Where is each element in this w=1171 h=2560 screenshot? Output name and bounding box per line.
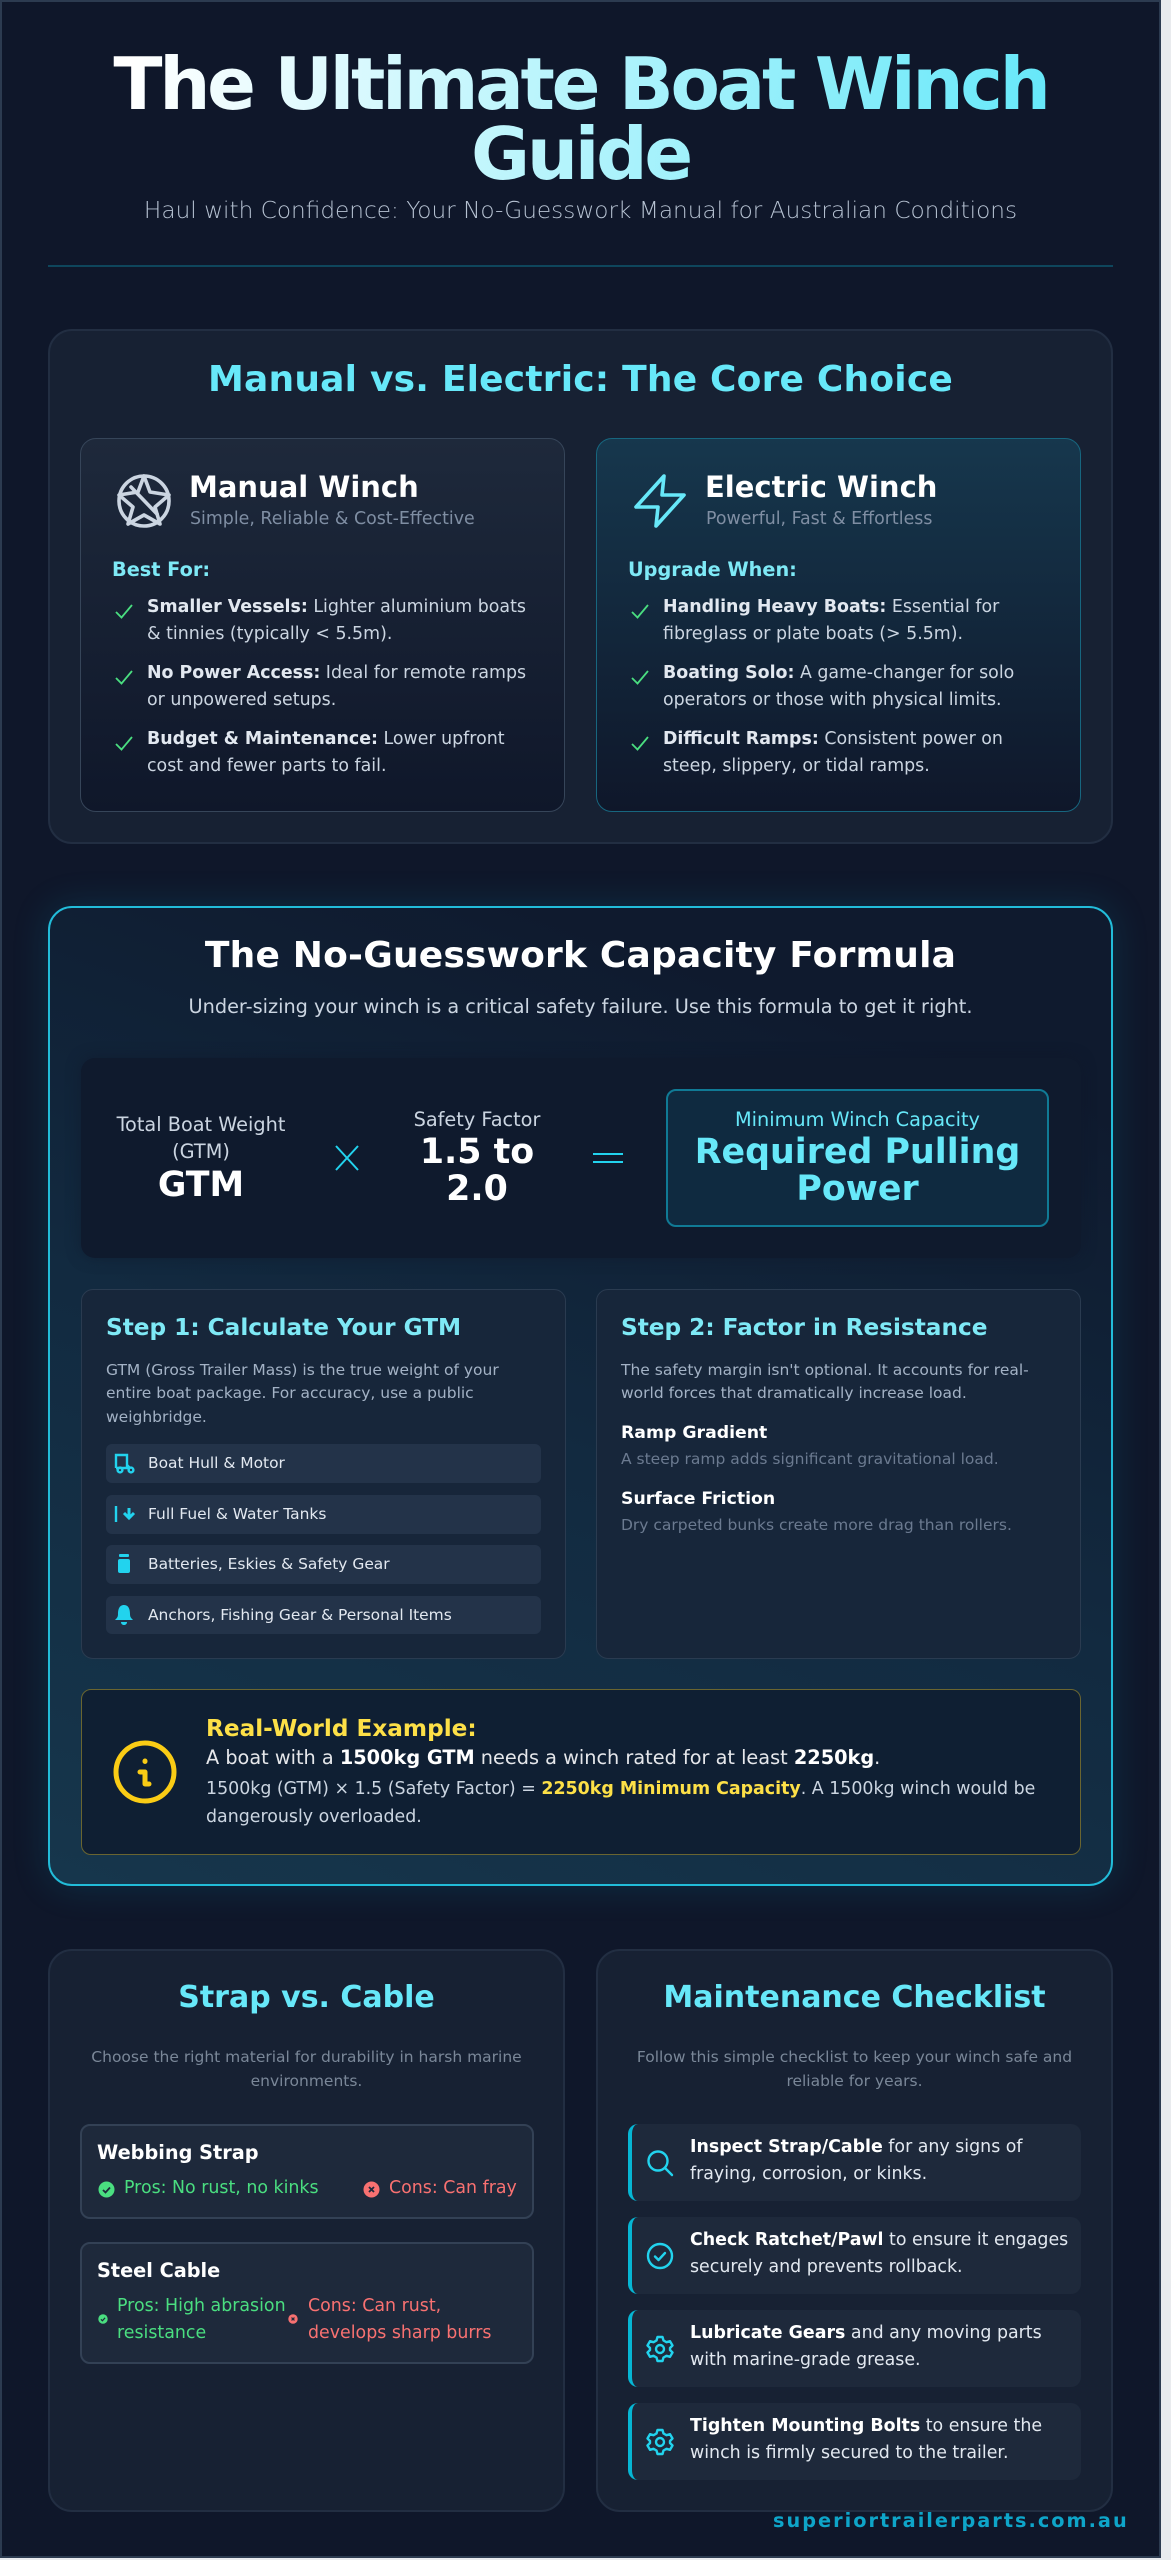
- steel cons: [288, 2296, 491, 2343]
- icon: equals: [593, 1153, 623, 1163]
- icon: fuel: [114, 1506, 135, 1522]
- list: best for items: Smaller Vessels: Lighter aluminium boats: [147, 597, 526, 617]
- item: inspect: Inspect Strap/Cable for any signs of: [690, 2137, 1023, 2157]
- heading: formula: The No-Guesswork Capacity Formula: [205, 935, 956, 976]
- webbing cons: Cons: Can fray: [389, 2178, 517, 2198]
- item: anchors: [106, 1596, 541, 1634]
- factor: ramp gradient: [621, 1423, 999, 1468]
- card: steel cable: [80, 2242, 534, 2364]
- list: upgrade items: fibreglass or plate boats (> 5.5m).: [663, 624, 963, 644]
- item: boat hull: Boat Hull & Motor: [148, 1454, 285, 1472]
- step 1 text: GTM (Gross Trailer Mass) is the true weight of your: [106, 1361, 499, 1379]
- item: ratchet: [628, 2217, 1081, 2294]
- item: ratchet: Check Ratchet/Pawl to ensure it engages: [690, 2230, 1068, 2250]
- card: manual winch: [80, 438, 565, 812]
- factor: surface friction: [621, 1489, 1012, 1534]
- item: fuel tanks: Full Fuel & Water Tanks: [148, 1505, 326, 1523]
- item: boat hull: [106, 1444, 541, 1483]
- item: anchors: Anchors, Fishing Gear & Personal Items: [148, 1606, 452, 1624]
- card: electric winch: [596, 438, 1081, 812]
- example calculation: [206, 1779, 1035, 1827]
- icon: manual winch star wheel: [117, 474, 171, 528]
- list: upgrade items: operators or those with physical limits.: [663, 690, 1002, 710]
- example heading: Real-World Example:: [206, 1715, 477, 1742]
- manual winch title: Manual Winch: [189, 470, 419, 504]
- item: gears: [628, 2310, 1081, 2387]
- card: step 1: [81, 1289, 566, 1659]
- step 1 text: weighbridge.: [106, 1408, 207, 1426]
- example calculation: 1500kg (GTM) × 1.5 (Safety Factor) = 2250kg Minimum Capacity. A 1500kg winch would be: [206, 1779, 1035, 1799]
- steel cons: develops sharp burrs: [308, 2323, 491, 2343]
- item: bolts: winch is firmly secured to the trailer.: [690, 2443, 1008, 2463]
- item: bolts: Tighten Mounting Bolts to ensure the: [690, 2416, 1042, 2436]
- list: best for items: Budget & Maintenance: Lower upfront: [147, 729, 505, 749]
- term: GTM: [116, 1113, 285, 1205]
- maintenance intro: Follow this simple checklist to keep your winch safe and: [637, 2048, 1072, 2066]
- webbing title: Webbing Strap: [97, 2141, 259, 2164]
- example sentence: A boat with a 1500kg GTM needs a winch rated for at least 2250kg.: [206, 1746, 880, 1769]
- list: upgrade items: steep, slippery, or tidal ramps.: [663, 756, 930, 776]
- item: inspect: [628, 2124, 1081, 2201]
- heading: strap vs cable: Strap vs. Cable: [178, 1980, 435, 2015]
- item: inspect: fraying, corrosion, or kinks.: [690, 2164, 927, 2184]
- result box: [666, 1089, 1049, 1227]
- list: upgrade items: Difficult Ramps: Consistent power on: [663, 729, 1003, 749]
- webbing pros: Pros: No rust, no kinks: [124, 2178, 319, 2198]
- card: step 2: [596, 1289, 1081, 1659]
- steel title: Steel Cable: [97, 2259, 220, 2282]
- icon: gear: [646, 2336, 674, 2362]
- step 1 text: entire boat package. For accuracy, use a public: [106, 1384, 474, 1402]
- result box: Minimum Winch Capacity: [735, 1108, 980, 1131]
- term: GTM: GTM: [158, 1165, 244, 1205]
- factor: surface friction: Dry carpeted bunks create more drag than rollers.: [621, 1516, 1012, 1534]
- icon: gear: [646, 2428, 674, 2456]
- electric winch title: Electric Winch: [705, 470, 937, 504]
- strap intro: [91, 2048, 522, 2090]
- icon: trailer: [114, 1454, 135, 1474]
- list: upgrade items: Boating Solo: A game-changer for solo: [663, 663, 1014, 683]
- panel: strap vs cable: [48, 1949, 565, 2512]
- list: upgrade items: Handling Heavy Boats: Essential for: [663, 597, 999, 617]
- upgrade when label: Upgrade When:: [628, 558, 797, 581]
- heading: maintenance: Maintenance Checklist: [663, 1980, 1046, 2015]
- title: The Ultimate Boat Winch Guide: [113, 42, 1048, 196]
- term: GTM: Total Boat Weight (GTM): [117, 1113, 285, 1163]
- maintenance intro: [637, 2048, 1072, 2090]
- panel: capacity formula: [48, 906, 1113, 1886]
- item: gears: Lubricate Gears and any moving parts: [690, 2323, 1042, 2343]
- item: batteries: [106, 1545, 541, 1584]
- item: ratchet: securely and prevents rollback.: [690, 2257, 963, 2277]
- icon: info: [114, 1740, 176, 1804]
- footer: website: superiortrailerparts.com.au: [773, 2509, 1129, 2532]
- heading: core choice: Manual vs. Electric: The Core Choice: [208, 359, 953, 400]
- best for label: Best For:: [112, 558, 210, 581]
- icon: multiply: [335, 1145, 359, 1171]
- term: safety factor: [414, 1108, 540, 1209]
- formula bar: [81, 1058, 1081, 1258]
- steel pros: Pros: High abrasion: [117, 2296, 286, 2316]
- callout: real-world example: [81, 1689, 1081, 1855]
- step 2 heading: Step 2: Factor in Resistance: [621, 1314, 987, 1341]
- factor: ramp gradient: Ramp Gradient: [621, 1423, 767, 1443]
- step 1 heading: Step 1: Calculate Your GTM: [106, 1314, 461, 1341]
- result box: Required Pulling Power: [695, 1132, 1020, 1209]
- manual winch subtitle: Simple, Reliable & Cost-Effective: [190, 509, 475, 529]
- strap intro: Choose the right material for durability in harsh marine: [91, 2048, 522, 2066]
- item: bolts: [628, 2403, 1081, 2480]
- example calculation: dangerously overloaded.: [206, 1807, 422, 1827]
- step 2 text: The safety margin isn't optional. It accounts for real-: [621, 1361, 1029, 1379]
- item: batteries: Batteries, Eskies & Safety Gear: [148, 1555, 390, 1573]
- term: safety factor: 1.5 to 2.0: [420, 1132, 534, 1209]
- list: best for items: or unpowered setups.: [147, 690, 336, 710]
- factor: surface friction: Surface Friction: [621, 1489, 775, 1509]
- item: fuel tanks: [106, 1495, 541, 1534]
- steel pros: [98, 2296, 286, 2343]
- maintenance intro: reliable for years.: [786, 2072, 923, 2090]
- list: best for items: & tinnies (typically < 5.5m).: [147, 624, 392, 644]
- electric winch subtitle: Powerful, Fast & Effortless: [706, 509, 932, 529]
- steel cons: Cons: Can rust,: [308, 2296, 441, 2316]
- factor: ramp gradient: A steep ramp adds significant gravitational load.: [621, 1450, 999, 1468]
- icon: check circle: [646, 2242, 674, 2270]
- formula intro: Under-sizing your winch is a critical safety failure. Use this formula to get it right.: [188, 995, 972, 1018]
- list: best for items: [115, 597, 526, 776]
- list: upgrade items: [631, 597, 1014, 776]
- icon: lightning bolt: [634, 474, 686, 528]
- panel: maintenance checklist: [596, 1949, 1113, 2512]
- subtitle: Haul with Confidence: Your No-Guesswork Manual for Australian Conditions: [144, 197, 1017, 224]
- icon: magnifier: [647, 2150, 674, 2176]
- step 2 text: [620, 1361, 1029, 1402]
- strap intro: environments.: [251, 2072, 362, 2090]
- card: webbing strap: [80, 2124, 534, 2219]
- icon: bell: [115, 1605, 133, 1625]
- term: safety factor: Safety Factor: [414, 1108, 540, 1131]
- step 1 text: [106, 1361, 499, 1426]
- panel: manual vs electric: [48, 329, 1113, 844]
- step 2 text: world forces that dramatically increase load.: [621, 1384, 967, 1402]
- steel pros: resistance: [117, 2323, 206, 2343]
- item: gears: with marine-grade grease.: [690, 2350, 921, 2370]
- icon: battery: [118, 1554, 130, 1573]
- list: best for items: No Power Access: Ideal for remote ramps: [147, 663, 526, 683]
- list: best for items: cost and fewer parts to fail.: [147, 756, 386, 776]
